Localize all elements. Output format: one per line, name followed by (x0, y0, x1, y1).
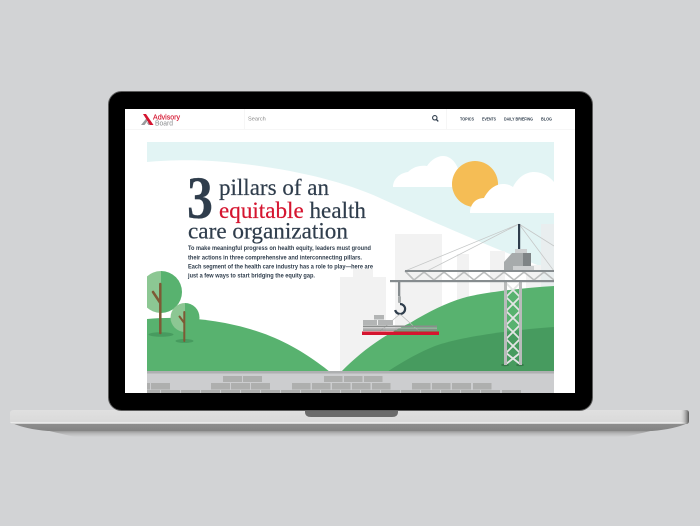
navigation links: TOPICS (460, 117, 474, 122)
laptop base (10, 410, 689, 437)
title (187, 165, 366, 244)
title: care organization (188, 218, 349, 244)
cloud right (470, 172, 554, 213)
title: 3 (187, 165, 213, 231)
crane jib (390, 270, 554, 282)
laptop bezel (108, 92, 592, 410)
laptop mockup scene (10, 91, 689, 436)
site navigation bar (125, 109, 575, 130)
logo (141, 112, 180, 127)
navigation links: DAILY BRIEFING (504, 117, 533, 122)
crane hook (380, 282, 419, 331)
intro text: their actions in three comprehensive and interconnecting pillars. (188, 254, 362, 261)
logo: Board (155, 120, 173, 127)
crane mast (518, 224, 520, 250)
navigation links (460, 117, 552, 122)
title: pillars of an (219, 175, 329, 200)
tree large (147, 271, 182, 337)
cloud left (393, 156, 460, 187)
tree small (170, 303, 200, 343)
crane cables (405, 224, 554, 271)
ground wall with bricks (147, 371, 554, 393)
navigation links: EVENTS (482, 117, 496, 122)
logo: Advisory (153, 112, 180, 122)
intro text: To make meaningful progress on health equity, leaders must ground (188, 245, 371, 252)
green hill left (147, 318, 330, 372)
crane tower (501, 282, 524, 366)
illustration (140, 142, 554, 393)
intro text (187, 245, 373, 279)
title: equitable health (219, 198, 366, 223)
brick load (362, 315, 439, 335)
background buildings (340, 224, 554, 373)
green hill right (341, 286, 554, 372)
intro text: Each segment of the health care industry has a role to play—here are (188, 263, 373, 270)
screen (125, 109, 575, 393)
sun (452, 161, 498, 207)
crane cab (504, 249, 534, 270)
construction crane (362, 224, 554, 366)
sky (147, 142, 554, 265)
search field label: Search (248, 117, 266, 123)
darker hill (387, 327, 554, 372)
intro text: just a few ways to start bridging the equity gap. (187, 272, 315, 279)
icon: search magnifier (433, 116, 438, 121)
navigation links: BLOG (541, 117, 552, 122)
white hillside (147, 160, 537, 371)
